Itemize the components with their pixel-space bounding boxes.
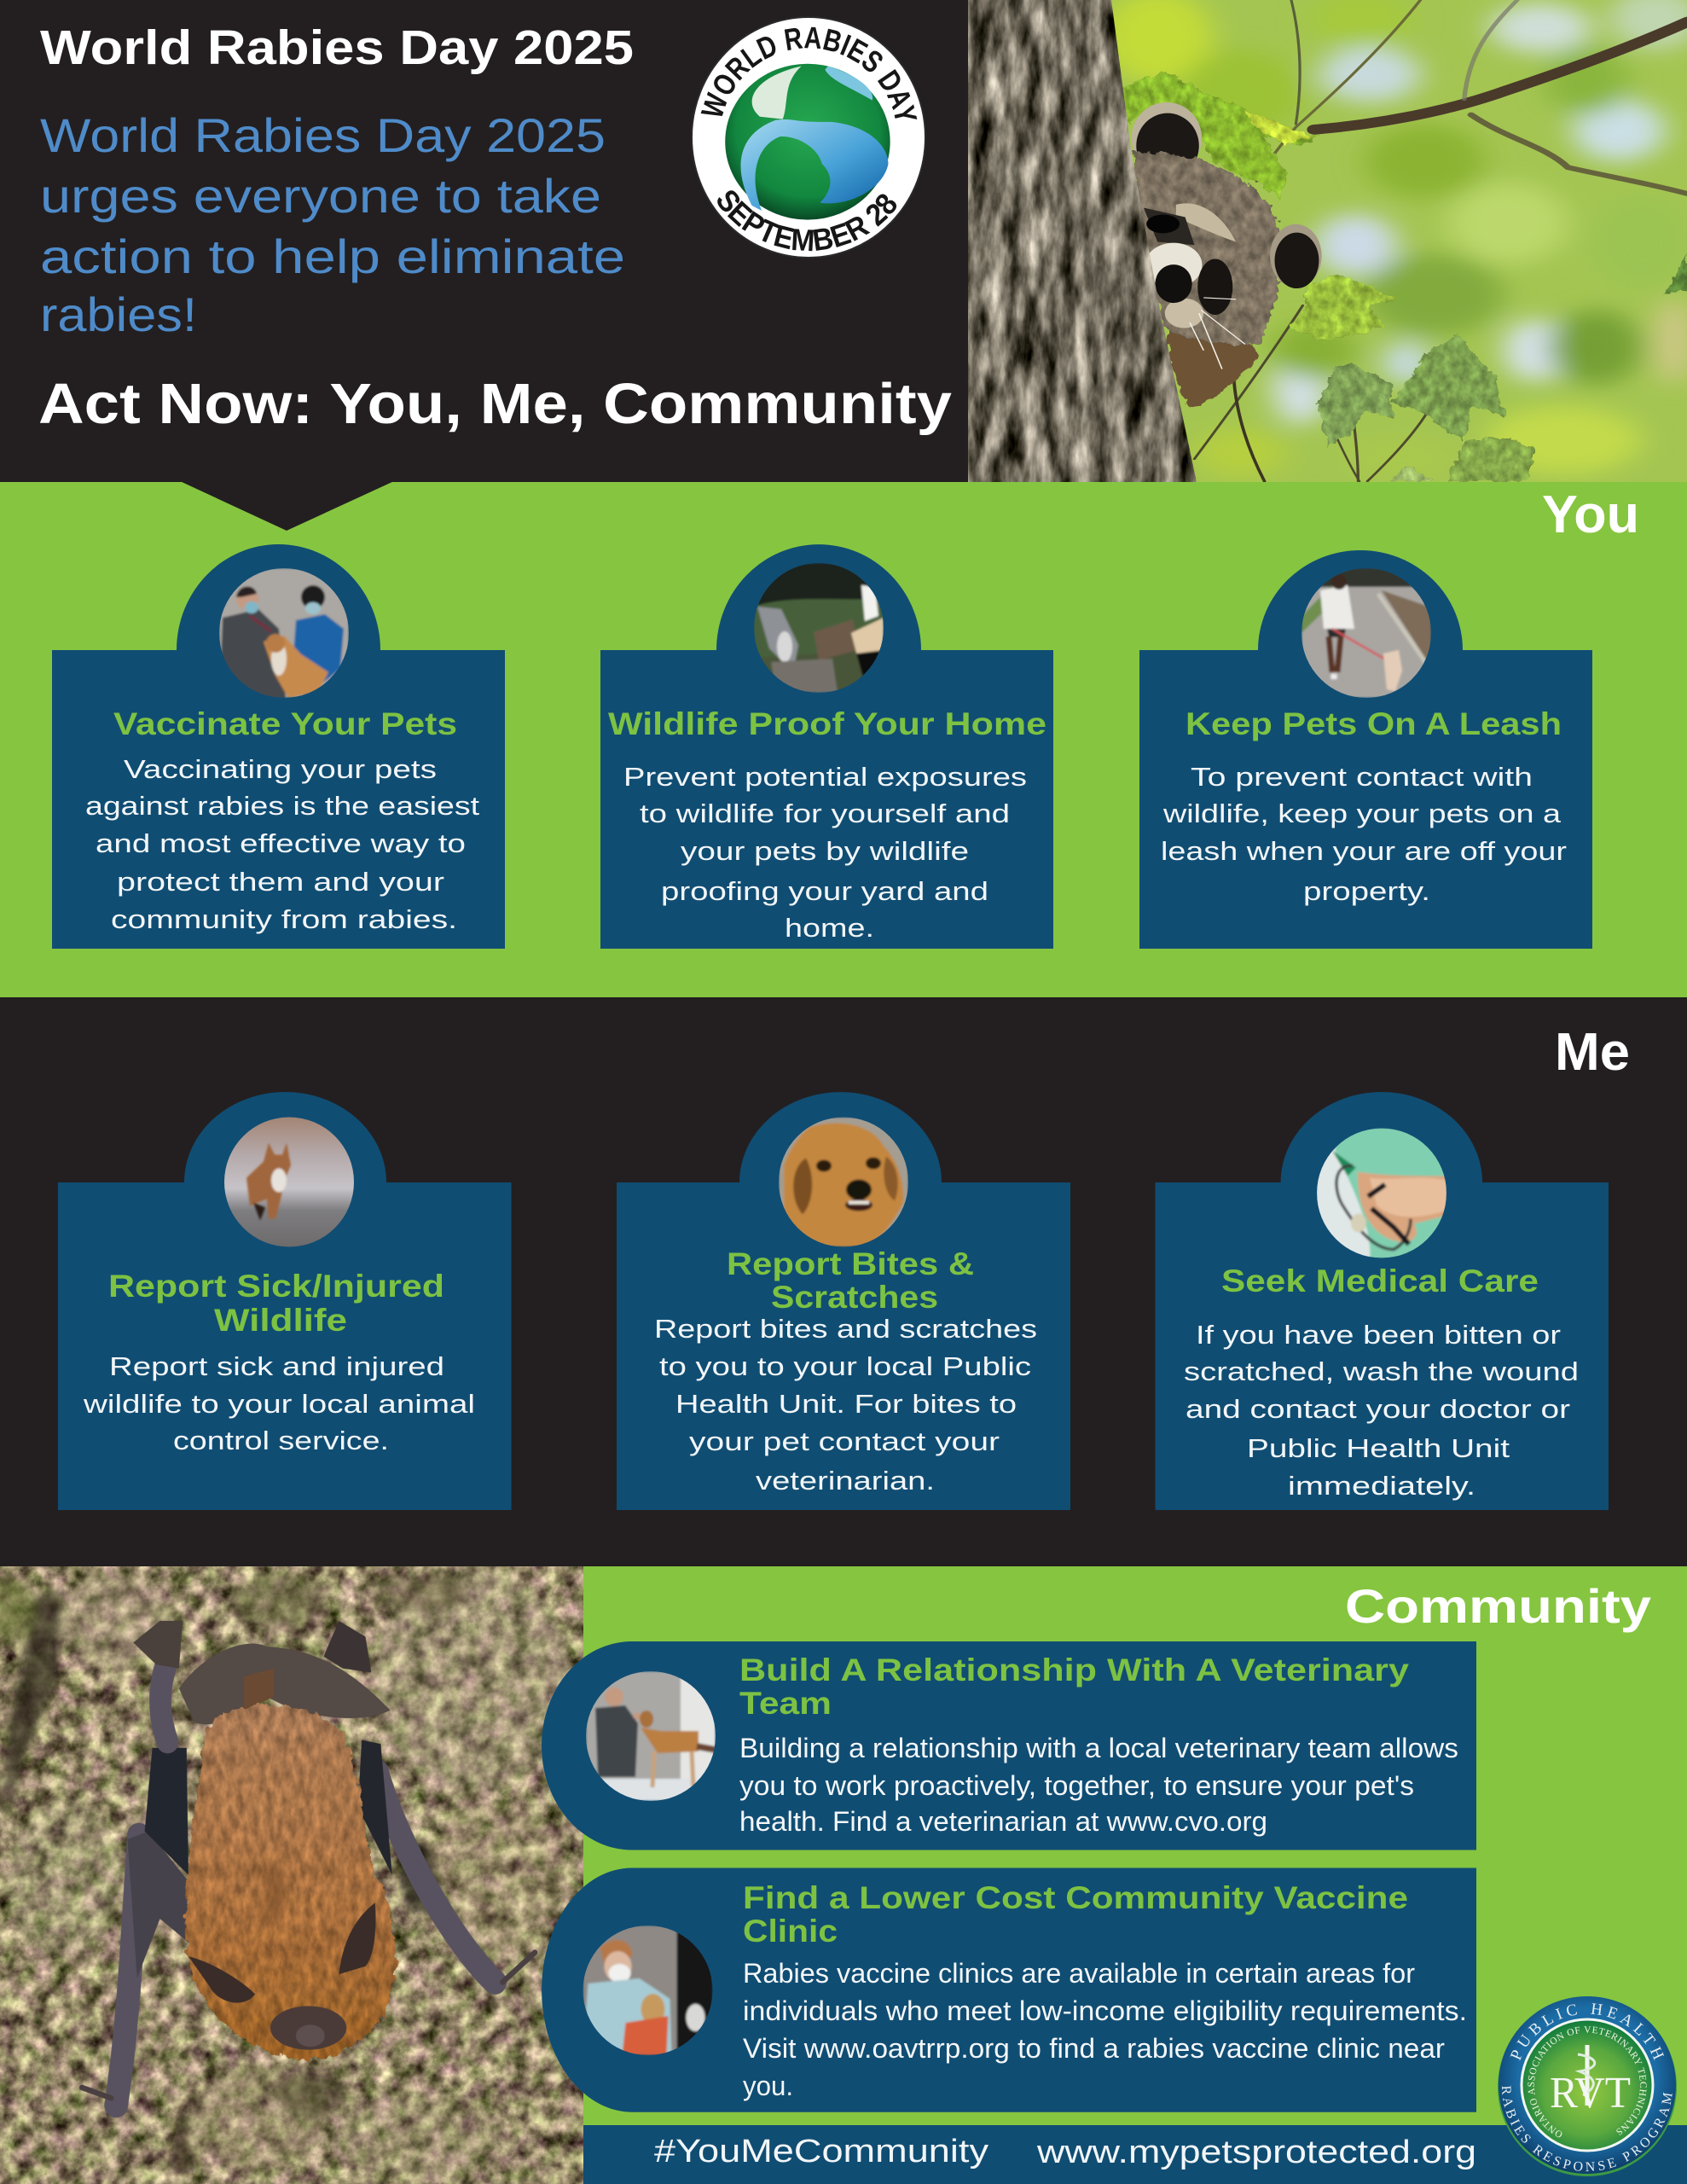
body text: To prevent contact with (1191, 762, 1533, 792)
panel: Build A Relationship With A Veterinary Team (542, 1641, 1476, 1850)
icon: RVT Rabies Response Program seal: PUBLIC HEALTH (1510, 2003, 1665, 2061)
heading: Scratches (771, 1280, 938, 1315)
body text (83, 1351, 475, 1455)
bat body (82, 1621, 535, 2106)
body text: wildlife, keep your pets on a (1162, 799, 1562, 828)
tree trunk (968, 0, 1215, 482)
photo: woman walking dog on leash (1301, 568, 1431, 698)
body text (1161, 762, 1567, 906)
body text (739, 1733, 1458, 1837)
intro text: rabies! (40, 288, 197, 341)
header panel (0, 0, 968, 531)
header pointer triangle (180, 481, 394, 531)
icon: World Rabies Day logo (691, 16, 926, 258)
heading: Report Sick/Injured (108, 1269, 444, 1304)
card: Keep Pets On A Leash (1139, 550, 1592, 949)
body text: protect them and your (117, 867, 444, 897)
section: Community green band (583, 1566, 1687, 2125)
section label: Me: Me (1555, 1023, 1630, 1082)
leaves (1123, 72, 1687, 481)
icon: RVT Rabies Response Program seal: RABIES RESPONSE PROGRAM (1501, 2085, 1673, 2172)
body text: individuals who meet low-income eligibility requirements. (743, 1995, 1467, 2026)
body text: and contact your doctor or (1186, 1394, 1570, 1424)
body text: control service. (173, 1426, 389, 1455)
icon: RVT Rabies Response Program seal: RVT (1550, 2069, 1631, 2117)
heading: Team (739, 1686, 832, 1721)
photo: snarling dog (779, 1118, 908, 1247)
tagline: Act Now: You, Me, Community (38, 372, 952, 436)
body text: health. Find a veterinarian at www.cvo.org (739, 1806, 1267, 1837)
photo: vet holding cat (583, 1926, 713, 2055)
photo: opossum and skunk (754, 563, 884, 693)
card: Wildlife Proof Your Home (600, 544, 1053, 949)
body text: Health Unit. For bites to (675, 1389, 1017, 1419)
body text: Public Health Unit (1247, 1433, 1510, 1463)
intro text: urges everyone to take (40, 169, 601, 223)
heading: Keep Pets On A Leash (1186, 706, 1562, 741)
body text: to wildlife for yourself and (640, 799, 1010, 828)
body text: your pet contact your (689, 1426, 1000, 1456)
footer website: www.mypetsprotected.org (1036, 2135, 1476, 2170)
body text (654, 1314, 1037, 1496)
body text: Report sick and injured (109, 1351, 444, 1381)
icon: RVT Rabies Response Program seal (1498, 1996, 1677, 2176)
body text: If you have been bitten or (1196, 1320, 1561, 1350)
intro text: World Rabies Day 2025 (40, 108, 606, 162)
body text: Visit www.oavtrrp.org to find a rabies vaccine clinic near (743, 2033, 1445, 2064)
heading: Find a Lower Cost Community Vaccine (743, 1880, 1408, 1915)
photo: vet examining dog (586, 1671, 716, 1801)
body text (85, 754, 479, 934)
body text: Report bites and scratches (654, 1314, 1037, 1344)
body text: to you to your local Public (659, 1351, 1031, 1381)
heading (739, 1653, 1409, 1721)
photo: bat on bark (0, 1566, 583, 2184)
body text: Building a relationship with a local veterinary team allows (739, 1733, 1458, 1763)
body text (743, 1958, 1467, 2101)
body text: Rabies vaccine clinics are available in certain areas for (743, 1958, 1415, 1989)
heading: Build A Relationship With A Veterinary (739, 1653, 1409, 1687)
heading: Clinic (743, 1914, 838, 1949)
footer band (583, 2125, 1687, 2184)
raccoon (1132, 102, 1322, 406)
body text: community from rabies. (111, 904, 457, 934)
body text (623, 762, 1027, 943)
body text: wildlife to your local animal (83, 1389, 475, 1419)
body text: and most effective way to (96, 828, 466, 858)
body text: proofing your yard and (661, 876, 988, 906)
intro text: action to help eliminate (40, 229, 625, 283)
photo: vet and child with dog (219, 568, 349, 698)
card: Seek Medical Care (1155, 1092, 1609, 1510)
footer hashtag: #YouMeCommunity (654, 2134, 988, 2169)
heading: Seek Medical Care (1221, 1263, 1539, 1298)
body text: immediately. (1288, 1471, 1475, 1501)
body text: you. (743, 2071, 793, 2101)
body text: you to work proactively, together, to ensure your pet's (739, 1770, 1414, 1801)
card: Report Bites & Scratches (617, 1092, 1070, 1510)
heading: Report Bites & (727, 1246, 974, 1281)
icon: World Rabies Day logo: WORLD RABIES DAY (701, 27, 918, 119)
section: You green band (0, 482, 1687, 997)
heading: Vaccinate Your Pets (113, 706, 457, 741)
body text: your pets by wildlife (681, 836, 969, 866)
body text: against rabies is the easiest (85, 791, 479, 821)
section label: Community: Community (1345, 1579, 1651, 1633)
photo: medic with stethoscope (1316, 1128, 1447, 1259)
card: Report Sick/Injured Wildlife (58, 1092, 512, 1510)
body text: Prevent potential exposures (623, 762, 1027, 792)
panel: Find a Lower Cost Community Vaccine Clinic (542, 1868, 1476, 2112)
body text: Vaccinating your pets (124, 754, 437, 784)
photo: raccoon peeking from tree (968, 0, 1687, 482)
icon: World Rabies Day logo: SEPTEMBER 28 (717, 190, 897, 251)
icon: RVT Rabies Response Program seal: ONTARIO ASSOCIATION OF VETERINARY TECHNICIANS (1528, 2026, 1647, 2138)
heading (108, 1269, 444, 1338)
branches (1194, 0, 1687, 481)
card: Vaccinate Your Pets (52, 544, 505, 949)
title: World Rabies Day 2025 (40, 20, 634, 75)
body text: veterinarian. (756, 1466, 935, 1496)
section label: You: You (1542, 485, 1639, 544)
intro text (40, 108, 625, 341)
body text: leash when your are off your (1161, 836, 1567, 866)
foliage blur (1102, 0, 1687, 480)
heading (743, 1880, 1408, 1949)
body text (1184, 1320, 1579, 1501)
body text: property. (1303, 876, 1430, 906)
heading: Wildlife (214, 1303, 347, 1338)
photo: fox (224, 1118, 354, 1247)
heading (727, 1246, 974, 1315)
body text: scratched, wash the wound (1184, 1356, 1579, 1386)
heading: Wildlife Proof Your Home (608, 706, 1046, 741)
body text: home. (785, 913, 874, 943)
